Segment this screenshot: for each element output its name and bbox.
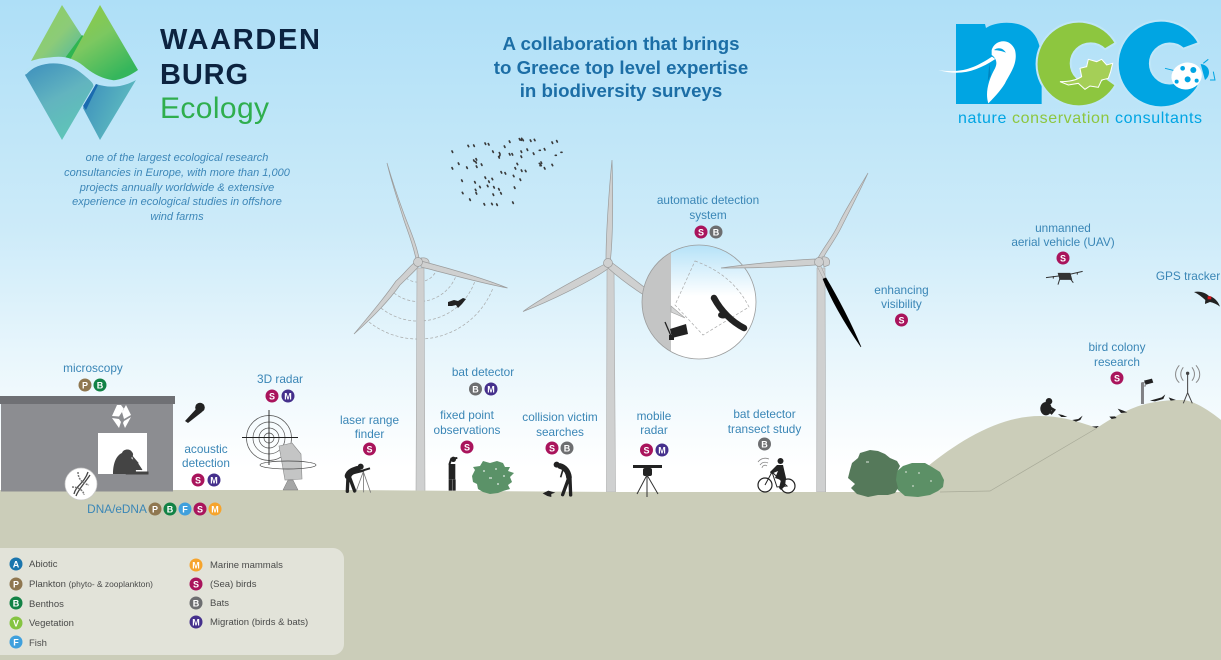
legend: left column: Vegetation (29, 618, 74, 629)
label: mobile radar: radar (640, 423, 668, 437)
icon: DNA circle (65, 468, 97, 500)
legend: left column: A (13, 559, 20, 569)
bushes at hill foot (848, 450, 944, 497)
hill researcher and colony birds (1040, 271, 1220, 428)
label: bird colony research (1088, 340, 1146, 384)
blades (354, 163, 508, 334)
label: microscopy: microscopy (63, 361, 123, 375)
label: enhancing visibility (874, 283, 929, 326)
label: laser range finder: laser range (340, 413, 399, 427)
radar target (242, 410, 298, 465)
legend: left column: F (13, 637, 19, 647)
legend: left column: Abiotic (29, 559, 58, 570)
logo: Waardenburg Ecology (25, 5, 320, 140)
main heading (494, 33, 748, 101)
label: acoustic detection: S (195, 475, 201, 485)
legend: left column: Benthos (29, 599, 64, 610)
label: GPS tracker: GPS tracker (1156, 269, 1220, 283)
ground and hills (0, 400, 1221, 660)
label: UAV: S (1060, 253, 1066, 263)
label: enhancing visibility: S (898, 315, 905, 325)
icon: ladybird (1165, 59, 1215, 93)
legend: right column: (Sea) birds (210, 579, 257, 590)
tower (416, 268, 425, 492)
label: DNA/eDNA (87, 502, 222, 516)
legend: right column: B (193, 598, 200, 608)
label: UAV: unmanned (1035, 221, 1091, 235)
legend: right column: Migration (birds & bats) (210, 617, 308, 628)
legend: left column: Fish (29, 638, 47, 649)
icon: eagle (714, 298, 744, 328)
sky background (0, 0, 1221, 492)
label: enhancing visibility: enhancing (874, 283, 929, 297)
icon: camera (665, 322, 688, 340)
bush near turbine (472, 461, 514, 494)
window with microscope user (98, 433, 148, 474)
label: acoustic detection (182, 442, 230, 486)
icon: stilt bird (938, 41, 1016, 103)
label: bird colony research: S (1114, 373, 1120, 383)
label: fixed point observations (434, 408, 501, 454)
label: DNA/eDNA: S (197, 504, 203, 514)
intro text block: projects annually worldwide & extensive (79, 182, 274, 194)
label: mobile radar: M (658, 445, 666, 455)
legend panel (0, 548, 344, 655)
ncc letters (956, 21, 1199, 107)
label: automatic detection system: S (698, 227, 704, 237)
antenna mast (1176, 365, 1200, 403)
legend: right column: M (192, 617, 200, 627)
figure: fixed point observer (449, 457, 457, 491)
legend: right column: Marine mammals (210, 560, 283, 571)
legend: left column (10, 558, 153, 649)
logo: NCC (938, 21, 1215, 127)
label: DNA/eDNA: F (182, 504, 188, 514)
label: bat detector transect study: B (761, 439, 768, 449)
sound waves (369, 269, 493, 339)
icon: bat (448, 298, 466, 308)
label: 3D radar (257, 372, 303, 402)
label: 3D radar: 3D radar (257, 372, 303, 386)
logo wordmark: Ecology (160, 92, 269, 125)
radar unit (260, 443, 316, 490)
figure: cyclist with bat detector (758, 458, 795, 493)
main heading: A collaboration that brings (502, 33, 740, 54)
label: UAV: aerial vehicle (UAV) (1011, 235, 1115, 249)
label: collision victim searches: collision victim (522, 410, 598, 424)
label: automatic detection system: automatic detection (657, 193, 759, 207)
intro text block: consultancies in Europe, with more than 1,000 (64, 167, 291, 179)
dead bird on ground (543, 491, 555, 497)
figure: mobile radar on tripod (633, 465, 662, 497)
label: bat detector transect study (728, 407, 801, 450)
icon: oak leaf (1060, 59, 1113, 89)
label: mobile radar: S (643, 445, 650, 455)
logo wordmark: WAARDEN (160, 24, 320, 56)
icon: GPS tagged bird (1194, 292, 1220, 307)
label: fixed point observations: observations (434, 423, 501, 437)
label: laser range finder: S (366, 444, 373, 454)
label: microscopy (63, 361, 123, 392)
main heading: in biodiversity surveys (520, 80, 722, 101)
label: bat detector transect study: transect study (728, 422, 801, 436)
legend: left column: P (13, 579, 19, 589)
intro text block (64, 152, 291, 223)
label: enhancing visibility: visibility (881, 297, 922, 311)
legend: right column: M (192, 560, 200, 570)
label: laser range finder (340, 413, 399, 456)
label: bat detector: B (472, 384, 479, 394)
label: fixed point observations: S (464, 442, 470, 452)
figure: collision victim searcher (543, 462, 571, 497)
label: laser range finder: finder (355, 427, 384, 441)
label: 3D radar: M (284, 391, 292, 401)
icon: microphone (185, 403, 205, 423)
label: DNA/eDNA: B (167, 504, 174, 514)
label: automatic detection system: B (713, 227, 720, 237)
label: DNA/eDNA: M (211, 504, 219, 514)
seated researcher (1040, 398, 1054, 415)
intro text block: wind farms (150, 211, 204, 223)
label: bat detector transect study: bat detector (733, 407, 796, 421)
icon: drone UAV (1046, 271, 1083, 285)
legend: left column: V (13, 618, 19, 628)
label: microscopy: P (82, 380, 88, 390)
wind turbine 1 with bat detector (354, 163, 508, 492)
label: bat detector: bat detector (452, 365, 514, 379)
label: collision victim searches: S (549, 443, 555, 453)
icon: small logo on wall (112, 405, 131, 428)
label: collision victim searches (522, 410, 598, 454)
logo mark (25, 5, 138, 140)
automatic detection magnifier circle (642, 245, 756, 359)
laboratory building (0, 396, 175, 492)
label: automatic detection system (657, 193, 759, 238)
label: bat detector (452, 365, 514, 396)
logo wordmark (160, 24, 320, 125)
label: mobile radar: mobile (637, 409, 672, 423)
label: automatic detection system: system (689, 208, 727, 222)
label: acoustic detection: detection (182, 456, 230, 470)
label: collision victim searches: B (564, 443, 571, 453)
bird flock (452, 138, 562, 205)
label: DNA/eDNA: DNA/eDNA (87, 502, 147, 516)
intro text block: one of the largest ecological research (86, 152, 268, 164)
label: mobile radar (637, 409, 672, 456)
legend: right column (190, 558, 308, 628)
intro text block: experience in ecological studies in offshore (72, 196, 282, 208)
label: bird colony research: bird colony (1088, 340, 1146, 354)
label: bird colony research: research (1094, 355, 1140, 369)
camera post (1141, 379, 1153, 404)
legend: left column: Plankton (phyto- & zooplankton) (29, 579, 153, 590)
legend: right column: S (193, 579, 199, 589)
label: acoustic detection: acoustic (184, 442, 228, 456)
label: UAV (1011, 221, 1115, 264)
colony birds (1058, 394, 1176, 428)
label: 3D radar: S (269, 391, 275, 401)
label: collision victim searches: searches (536, 425, 584, 439)
figure: laser range finder person (347, 464, 371, 493)
label: DNA/eDNA: P (152, 504, 158, 514)
label: microscopy: B (97, 380, 104, 390)
3D radar (242, 410, 316, 490)
label: acoustic detection: M (210, 475, 218, 485)
label: bat detector: M (487, 384, 495, 394)
wind turbine 2 (523, 160, 685, 492)
label: fixed point observations: fixed point (440, 408, 495, 422)
main heading: to Greece top level expertise (494, 57, 748, 78)
wind turbine 3 with black blade (721, 173, 868, 492)
legend: right column: Bats (210, 598, 229, 609)
logo wordmark: BURG (160, 59, 248, 91)
ncc wordmark: nature conservation consultants (958, 110, 1202, 127)
legend: left column: B (13, 598, 20, 608)
